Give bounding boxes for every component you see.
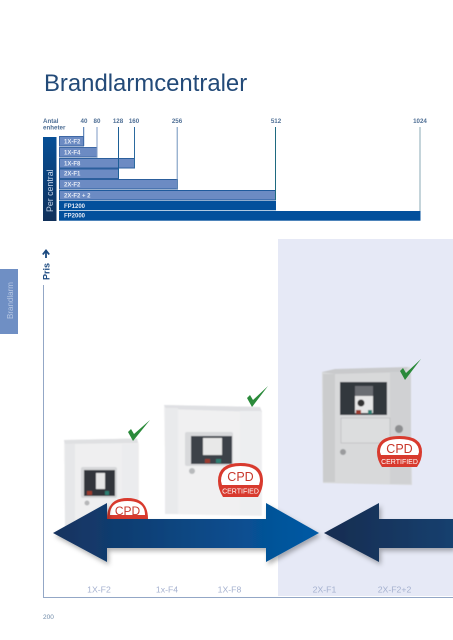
panel: capacity chart: [43, 118, 427, 221]
title: Brandlarmcentraler: [44, 70, 247, 97]
capacity values: 40: [81, 118, 88, 125]
arrow: 2X range: [324, 503, 453, 562]
cabinet: [164, 405, 262, 516]
price axis: [44, 285, 453, 598]
check mark 2: [247, 386, 268, 407]
bar labels: 2X-F2 + 2: [64, 194, 91, 200]
bar labels: FP2000: [64, 214, 86, 220]
product labels: [87, 584, 411, 594]
door: [341, 418, 390, 443]
bar labels: FP1200: [64, 204, 86, 210]
capacity values: 160: [129, 118, 140, 125]
capacity values: 512: [271, 118, 282, 125]
axis label: Antal enheter: enheter: [43, 125, 66, 132]
per central side label: Per central: [45, 169, 55, 212]
label: Pris with arrow: Pris: [42, 263, 52, 280]
check mark 1: [128, 420, 150, 441]
bar labels: 1X-F2: [64, 140, 81, 146]
side tab: Brandlarm: Brandlarm: [6, 282, 15, 319]
label: Pris with arrow: [42, 250, 52, 280]
page number: 200: [43, 614, 54, 621]
CPD badge 3: CERTIFIED: [381, 459, 418, 466]
panel: shaded 2X range: [278, 239, 453, 596]
bar labels: 2X-F2: [64, 182, 81, 188]
cabinet: [322, 367, 412, 485]
side tab: Brandlarm: [0, 269, 18, 334]
panel unit: 2X-F1: [322, 367, 412, 485]
product labels: 1X-F2: [87, 584, 111, 594]
cabinet: [64, 438, 139, 530]
bar labels: 1X-F4: [64, 150, 81, 156]
capacity values: 1024: [413, 118, 427, 125]
control display: [185, 432, 233, 466]
CPD badge 2: CPD: [227, 470, 254, 484]
product labels: 2X-F1: [313, 584, 336, 594]
CPD badge 1: CPD: [115, 504, 140, 518]
control display: [340, 382, 387, 415]
CPD badge 3: [377, 436, 422, 467]
capacity values: 128: [113, 118, 124, 125]
bar labels: 2X-F1: [64, 172, 81, 178]
CPD badge 1: [107, 498, 148, 519]
panel unit: 1X-F4: [164, 405, 262, 516]
check mark 3: [400, 359, 421, 380]
bars: [59, 136, 420, 221]
bar labels: 1X-F8: [64, 162, 81, 168]
product labels: 1x-F4: [156, 584, 178, 594]
axis label: Antal enheter: Antal: [43, 118, 59, 125]
per central side label: [43, 137, 56, 221]
bar labels: [64, 140, 91, 220]
capacity values: 256: [172, 118, 183, 125]
panel unit: 1X-F2: [64, 438, 139, 530]
arrow: 1X range: [53, 503, 319, 562]
capacity values: 80: [94, 118, 101, 125]
CPD badge 3: CPD: [386, 442, 413, 456]
CPD badge 2: CERTIFIED: [222, 488, 259, 496]
CPD badge 2: [218, 463, 263, 497]
control display: [81, 467, 117, 498]
product labels: 1X-F8: [218, 584, 241, 594]
product labels: 2X-F2+2: [378, 584, 411, 594]
capacity lines: [84, 127, 420, 211]
